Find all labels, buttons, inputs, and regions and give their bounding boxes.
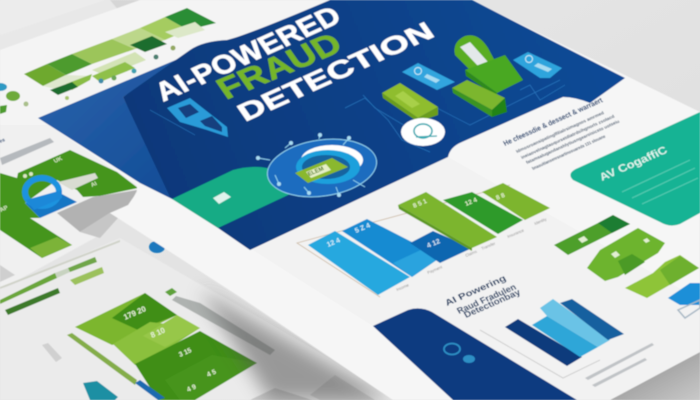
page shadow: [200, 290, 393, 400]
bar: lime short: 8 8: [495, 192, 507, 202]
green matrix chart: 179 20: [122, 304, 147, 322]
icon: green block right: [452, 80, 507, 117]
green matrix chart: 4 9: [186, 384, 198, 394]
grey blocks: [57, 190, 137, 232]
corner behind page: [600, 345, 700, 400]
piece: lower: [625, 255, 699, 298]
navy bottom panel: [373, 308, 577, 400]
bar: dark blue: [410, 231, 472, 263]
green matrix chart: 4 5: [206, 369, 218, 379]
icon: blue padlock: [23, 172, 77, 218]
intro text block: Idmosroansipatinglfilialrsimagnos amrmed: [515, 110, 605, 154]
axis labels: Transfer: [480, 241, 497, 251]
axis labels: Income: [395, 282, 410, 292]
bar: lime short: [482, 183, 550, 220]
axis labels: Identity: [533, 216, 547, 226]
bar: light blue: 12 4: [326, 237, 341, 249]
header: blue panel: [123, 0, 625, 250]
green progress bars: [0, 257, 104, 315]
green tag: ELEM: [307, 166, 325, 178]
icon: green block left: [382, 83, 438, 122]
axis labels: Insurance: [506, 227, 525, 239]
intro text block: [501, 96, 621, 171]
teal side panel: AV CogaffiC: [597, 144, 670, 184]
icon: teal arrow tag: [83, 381, 118, 400]
teal side panel: [570, 112, 700, 226]
green matrix chart: 3 15: [178, 347, 193, 359]
panel: top-left background sheet: [0, 0, 335, 132]
bar: dark blue: 4 12: [426, 238, 441, 250]
caption beside matrix: [42, 288, 275, 362]
title: FRAUD: [209, 26, 349, 106]
chart heading: Raud Fradulen: [455, 282, 518, 316]
green table: [24, 8, 216, 100]
green matrix chart: [75, 293, 257, 400]
bar: mid blue: 5 Z 4: [354, 222, 372, 235]
title: DETECTION: [232, 18, 440, 127]
axis labels: [395, 216, 547, 292]
chart axes: [297, 185, 510, 297]
header: fold band: [38, 46, 204, 200]
icon: blue orb under page: [149, 241, 165, 253]
intro text block: ineiaovelnagtaoqursetdiatrdsihgnorls zsolacd: [520, 114, 616, 160]
title: AI-POWERED: [149, 0, 347, 107]
piece: top: [554, 215, 630, 255]
icon: teal panel chip: [213, 192, 231, 204]
icon: white circle badge: [401, 118, 445, 146]
bar: green: [443, 192, 523, 234]
bar: light blue: [308, 231, 410, 295]
chart heading: Detectionbay: [462, 287, 522, 320]
bar: lime tall: [398, 192, 497, 251]
teal panel: [172, 167, 303, 228]
small icons on left edge: [0, 83, 28, 114]
icon: shield: [167, 98, 228, 137]
icon: blue card left: [402, 63, 455, 90]
intro text block: fatamsalugandanshlytiusngearoisicsto uotseiu: [525, 119, 621, 165]
axis labels: Claims: [464, 249, 478, 258]
icon: green padlock: [454, 35, 523, 97]
panel: mid-left green map sheet: UK: [53, 156, 64, 165]
bar chart: small blue: [480, 299, 624, 378]
chart heading: AI Powering: [443, 273, 508, 308]
chart heading: [443, 273, 522, 320]
icon cluster: blue people: [668, 283, 700, 318]
intro text block: bnasuitiansenrsnartinosuareds 131 slouane: [531, 134, 607, 171]
green matrix chart: 8 10: [149, 326, 167, 340]
icon: blue card right: [513, 52, 562, 78]
icon: ring: [444, 344, 460, 354]
green map: [0, 150, 138, 258]
axis labels: Payment: [426, 264, 444, 275]
green puzzle chart: [554, 215, 699, 298]
radar dial: [256, 133, 380, 203]
title: [149, 0, 440, 127]
bar: green: 12 4: [464, 196, 479, 208]
piece: middle: [587, 228, 665, 281]
left caption: [0, 137, 54, 165]
panel: mid-left green map sheet: [0, 125, 140, 290]
bar: mid blue: [342, 219, 441, 277]
bar: lime tall: 8 5 1: [412, 198, 428, 210]
bar chart: main: [297, 183, 550, 297]
panel: lower-left sheet: [0, 238, 400, 400]
circuit lines: [150, 80, 565, 152]
icon: chat: [463, 355, 475, 363]
panel: mid-left green map sheet: AI: [90, 181, 99, 189]
chart footnote: [585, 343, 654, 387]
intro text block: He cfeessdie & dessect & warraert: [501, 96, 605, 148]
